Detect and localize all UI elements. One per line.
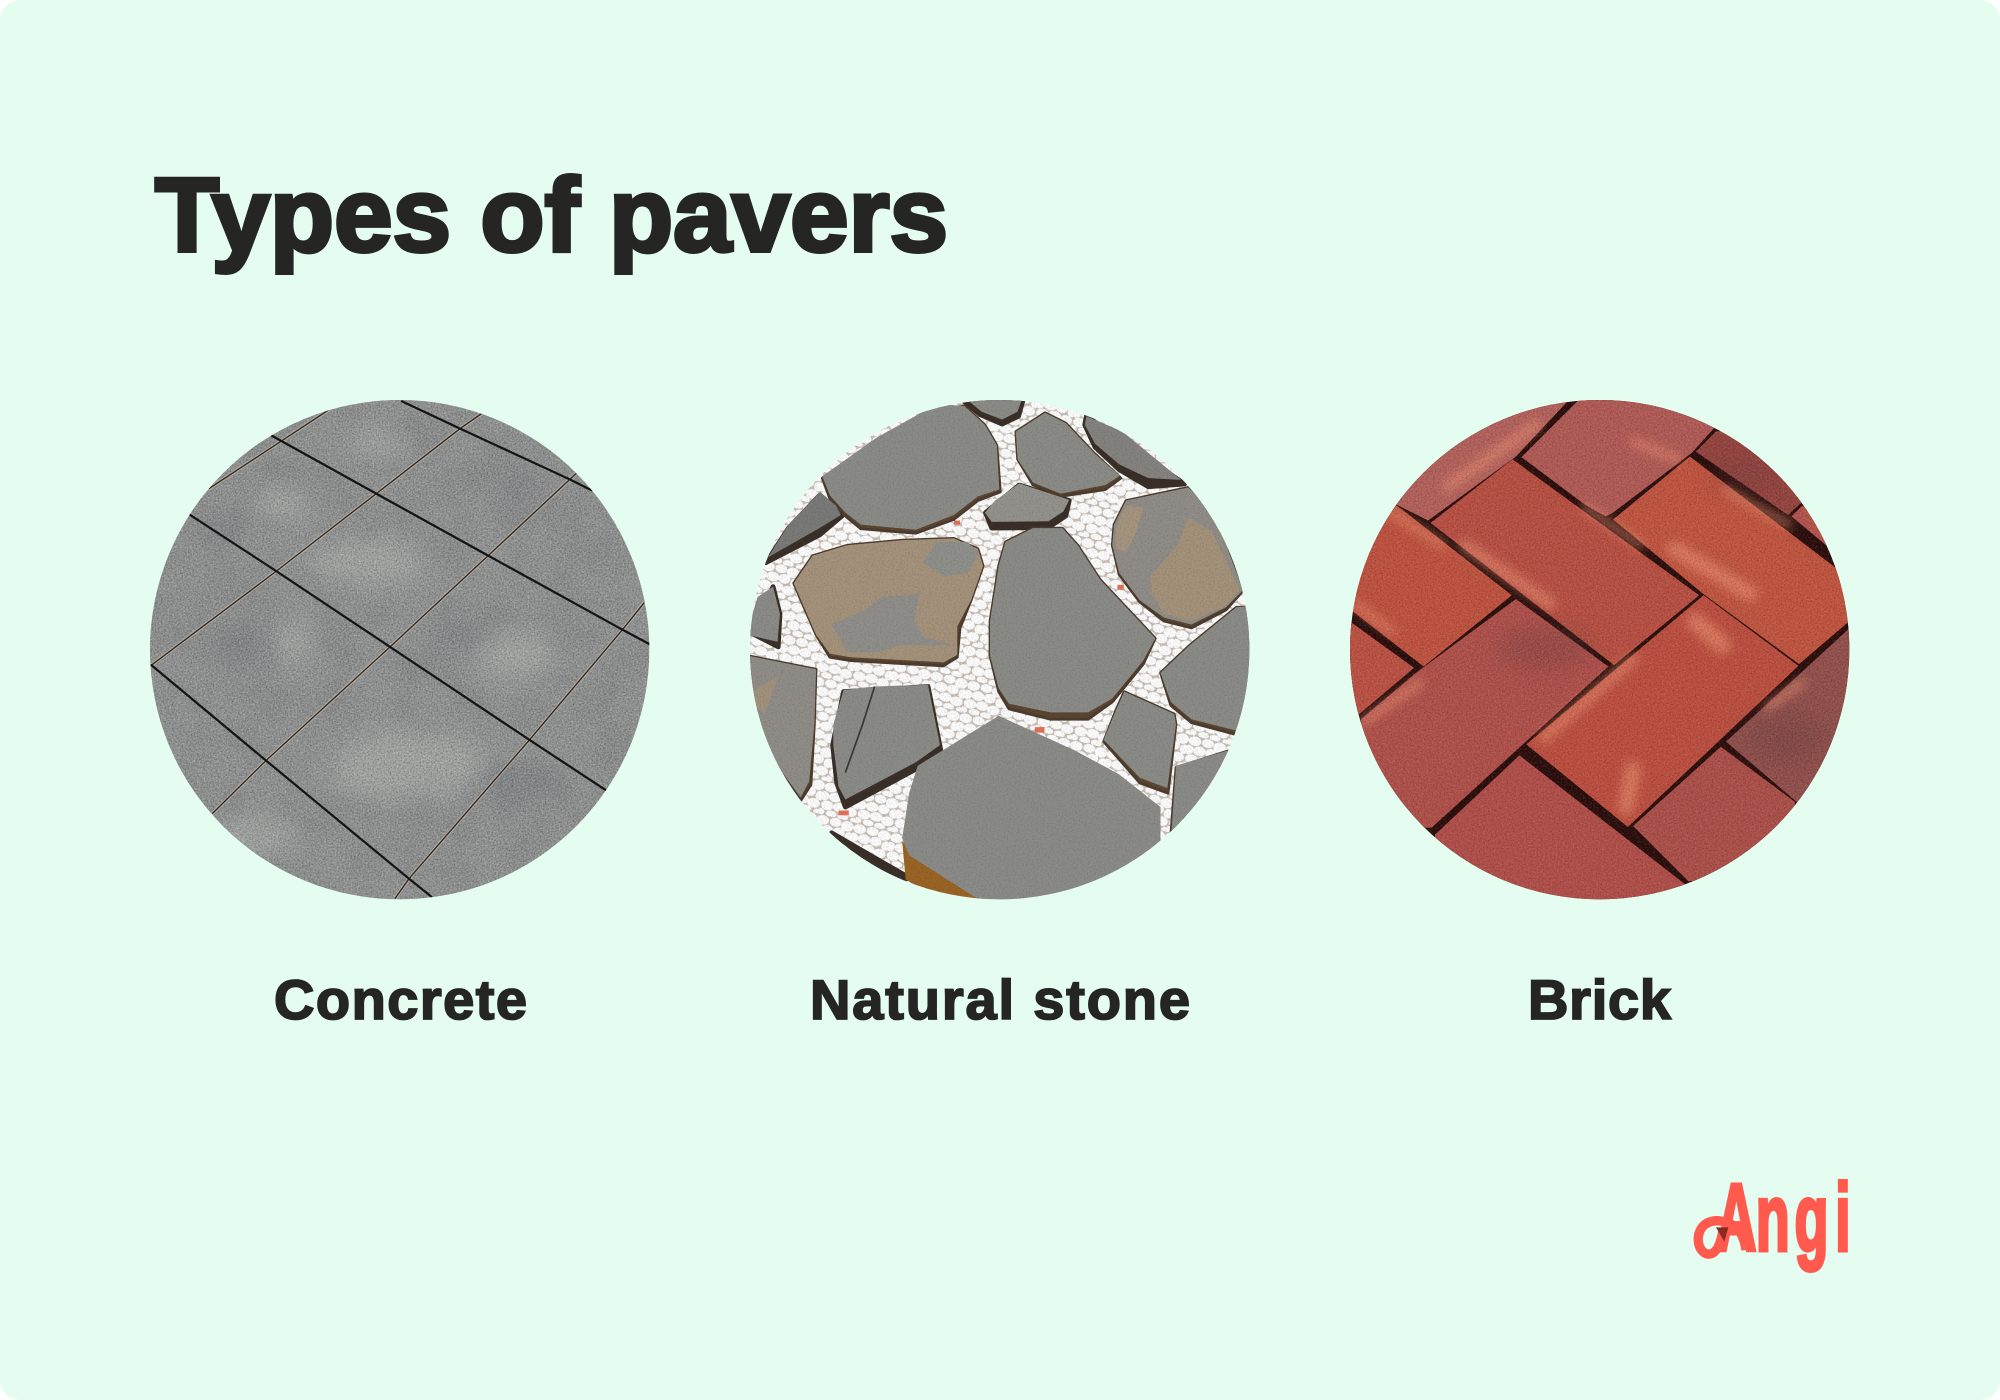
highlights on brick edges bbox=[1354, 425, 1826, 807]
title: Types of pavers bbox=[155, 157, 948, 274]
image: brick pavers in herringbone bbox=[1344, 390, 1853, 907]
logo wordmark: A bbox=[1716, 1164, 1756, 1271]
panel: natural stone bbox=[747, 397, 1253, 1031]
stones bbox=[747, 397, 1253, 903]
logo wordmark: i bbox=[1835, 1164, 1851, 1271]
logo loop on the A bbox=[1698, 1221, 1746, 1254]
image: natural stone pavers with white pebbles bbox=[747, 397, 1253, 903]
panel: brick bbox=[1344, 390, 1853, 1031]
label: concrete: Concrete bbox=[274, 968, 527, 1031]
image: concrete pavers bbox=[150, 400, 650, 899]
label: brick: Brick bbox=[1528, 968, 1672, 1031]
dark joints and edges bbox=[751, 401, 1185, 881]
logo wordmark: g bbox=[1795, 1164, 1829, 1271]
logo: Angi bbox=[1698, 1164, 1851, 1271]
logo wordmark: n bbox=[1756, 1164, 1790, 1271]
label: natural stone: Natural stone bbox=[810, 968, 1190, 1031]
panel: concrete bbox=[150, 400, 650, 1031]
tan stones bbox=[794, 538, 983, 662]
